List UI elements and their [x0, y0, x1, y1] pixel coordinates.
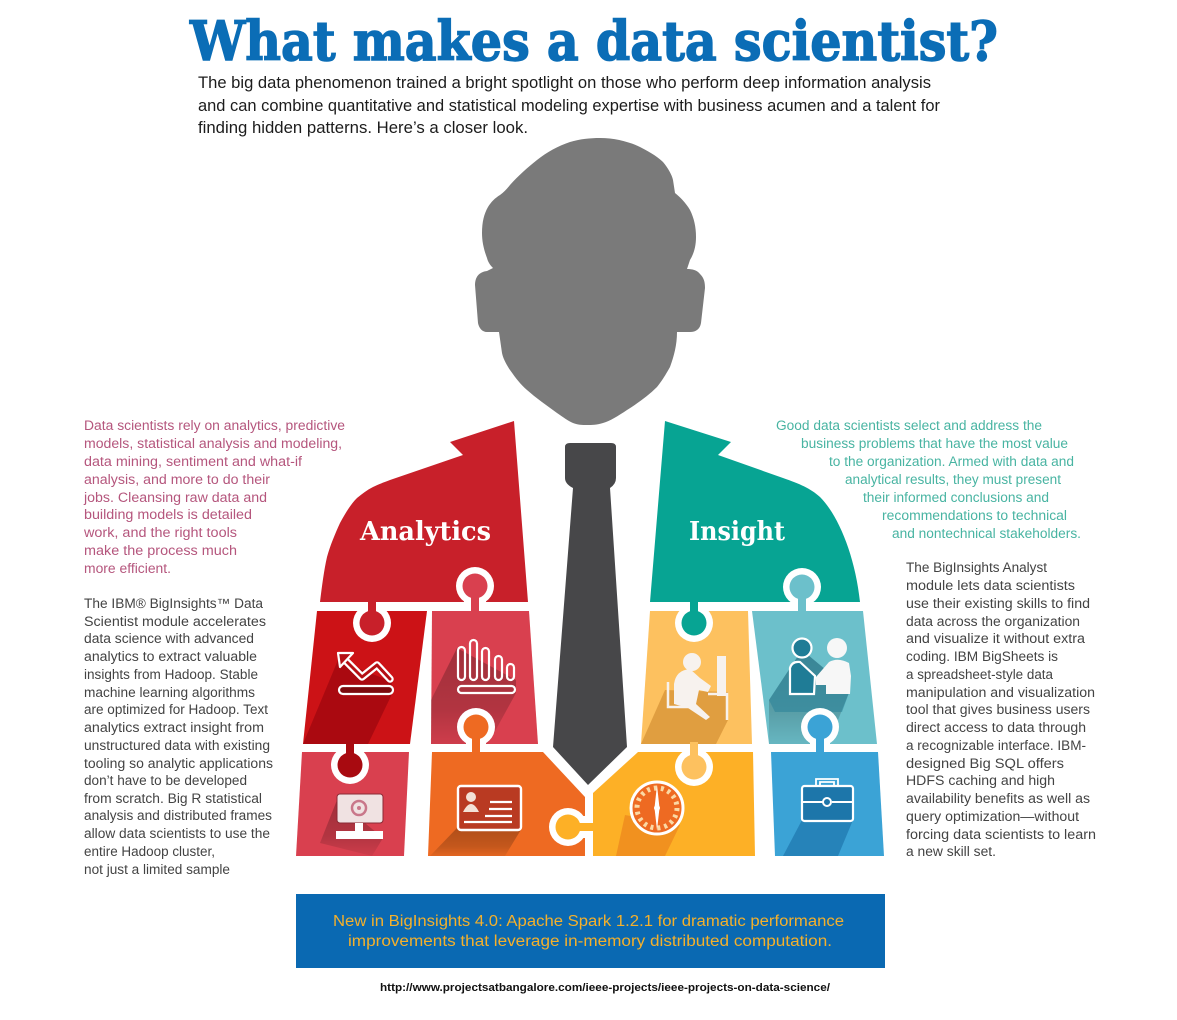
puzzle piece: handshake — [752, 611, 877, 744]
text block: analytics description: models, statistical analysis and modeling, — [84, 436, 342, 451]
text block: analytics description: building models is detailed — [84, 507, 252, 522]
text block: analyst module: a new skill set. — [906, 844, 996, 859]
text block: analytics description: jobs. Cleansing raw data and — [83, 490, 267, 505]
puzzle knob: analytics into trend piece — [353, 600, 391, 642]
puzzle knob: handshake piece into insight — [783, 568, 821, 613]
text block: analyst module: HDFS caching and high — [906, 773, 1055, 788]
title: What makes a data scientist? — [189, 9, 998, 73]
text block: analytics description: work, and the right tools — [83, 525, 237, 540]
text block: insight description: analytical results, they must present — [845, 472, 1061, 487]
text block: analyst module: coding. IBM BigSheets is — [906, 649, 1058, 664]
text block: data scientist module: analytics extract insight from — [84, 720, 264, 735]
callout banner: New in BigInsights 4.0: Apache Spark 1.2.1 for dramatic performance — [333, 913, 844, 930]
text block: data scientist module: tooling so analytic applications — [84, 756, 273, 771]
text block: analyst module: forcing data scientists to learn — [906, 827, 1096, 842]
icon: briefcase — [802, 779, 853, 821]
callout banner — [296, 894, 885, 968]
puzzle piece: desk worker — [641, 611, 752, 744]
intro text: finding hidden patterns. Here’s a closer look. — [198, 119, 528, 137]
text block: data scientist module: analysis and distributed frames — [84, 808, 272, 823]
icon: trend line — [338, 653, 393, 694]
text block: analytics description: data mining, sentiment and what-if — [84, 454, 302, 469]
text block: insight description: and nontechnical stakeholders. — [892, 526, 1081, 541]
text block: analyst module: designed Big SQL offers — [906, 756, 1064, 771]
text block: data scientist module: allow data scientists to use the — [84, 826, 270, 841]
text block: data scientist module: don’t have to be developed — [84, 773, 247, 788]
text block: data scientist module: data science with advanced — [84, 631, 254, 646]
icon: id card — [458, 786, 521, 830]
tie — [553, 443, 627, 785]
text block: analyst module — [906, 560, 1096, 859]
text block: insight description: Good data scientists select and address the — [776, 418, 1042, 433]
text block: data scientist module: are optimized for Hadoop. Text — [84, 702, 268, 717]
text block: analyst module: a spreadsheet-style data — [906, 667, 1053, 682]
text block: analyst module: manipulation and visualization — [906, 685, 1095, 700]
text block: data scientist module — [84, 596, 273, 877]
puzzle knob: bar chart piece into analytics — [456, 567, 494, 612]
text block: data scientist module: from scratch. Big R statistical — [84, 791, 262, 806]
text block: data scientist module: not just a limited sample — [84, 862, 230, 877]
panel: analytics jacket — [320, 421, 528, 602]
callout banner: improvements that leverage in-memory distributed computation. — [348, 933, 832, 950]
text block: data scientist module: entire Hadoop cluster, — [84, 844, 215, 859]
text block: data scientist module: unstructured data with existing — [84, 738, 270, 753]
text block: analyst module: tool that gives business users — [906, 702, 1090, 717]
puzzle knob: id card piece into bar chart — [457, 708, 495, 754]
text block: data scientist module: analytics to extract valuable — [84, 649, 257, 664]
puzzle piece: trend chart — [303, 611, 427, 744]
heading: analytics: Analytics — [359, 517, 491, 547]
text block: analytics description: more efficient. — [84, 561, 171, 576]
puzzle knob: desk worker into clock piece — [675, 742, 713, 786]
text block: analytics description: Data scientists rely on analytics, predictive — [84, 418, 345, 433]
icon: person at desk — [668, 653, 727, 720]
text block: analyst module: and visualize it without extra — [906, 631, 1086, 646]
icon: monitor — [336, 794, 383, 839]
heading: insight: Insight — [689, 517, 785, 547]
icon: clock — [631, 782, 683, 834]
text block: analyst module: direct access to data through — [906, 720, 1086, 735]
puzzle knob: briefcase piece into handshake — [801, 708, 839, 754]
text block: analyst module: use their existing skills to find — [906, 596, 1090, 611]
icon: bar chart — [458, 640, 515, 693]
puzzle knob: clock piece into id card — [549, 808, 595, 846]
icon: two people shaking hands — [790, 638, 851, 694]
text block: data scientist module: insights from Hadoop. Stable — [84, 667, 258, 682]
intro text — [198, 74, 940, 137]
text block: insight description: business problems that have the most value — [801, 436, 1068, 451]
puzzle piece: clock — [593, 752, 755, 856]
text block: data scientist module: The IBM® BigInsights™ Data — [84, 596, 263, 611]
source url: http://www.projectsatbangalore.com/ieee-projects/ieee-projects-on-data-science/ — [380, 982, 830, 994]
text block: analytics description: make the process much — [84, 543, 237, 558]
text block: analytics description: analysis, and more to do their — [84, 472, 271, 487]
text block: analyst module: data across the organization — [906, 614, 1080, 629]
puzzle knob: trend piece into monitor — [331, 742, 369, 784]
puzzle piece: briefcase — [771, 752, 884, 856]
intro text: and can combine quantitative and statistical modeling expertise with business acumen and a talent for — [198, 97, 940, 115]
text block: data scientist module: machine learning algorithms — [84, 685, 255, 700]
text block: analyst module: query optimization—without — [906, 809, 1079, 824]
text block: insight description: to the organization. Armed with data and — [829, 454, 1074, 469]
text block: insight description: their informed conclusions and — [863, 490, 1049, 505]
text block: analyst module: availability benefits as well as — [906, 791, 1090, 806]
text block: analyst module: The BigInsights Analyst — [906, 560, 1047, 575]
puzzle piece: monitor — [296, 752, 409, 856]
text block: analyst module: a recognizable interface. IBM- — [906, 738, 1086, 753]
head silhouette — [475, 138, 705, 425]
puzzle piece: id card — [428, 752, 585, 856]
text block: insight description: recommendations to technical — [882, 508, 1067, 523]
text block: insight description — [776, 418, 1081, 541]
panel: insight jacket — [650, 421, 860, 602]
text block: analytics description — [83, 418, 345, 576]
puzzle piece: bar chart — [431, 611, 538, 744]
intro text: The big data phenomenon trained a bright spotlight on those who perform deep information analysis — [198, 74, 931, 92]
puzzle knob: insight into desk worker — [675, 600, 713, 642]
text block: data scientist module: Scientist module accelerates — [84, 614, 266, 629]
text block: analyst module: module lets data scientists — [906, 578, 1075, 593]
